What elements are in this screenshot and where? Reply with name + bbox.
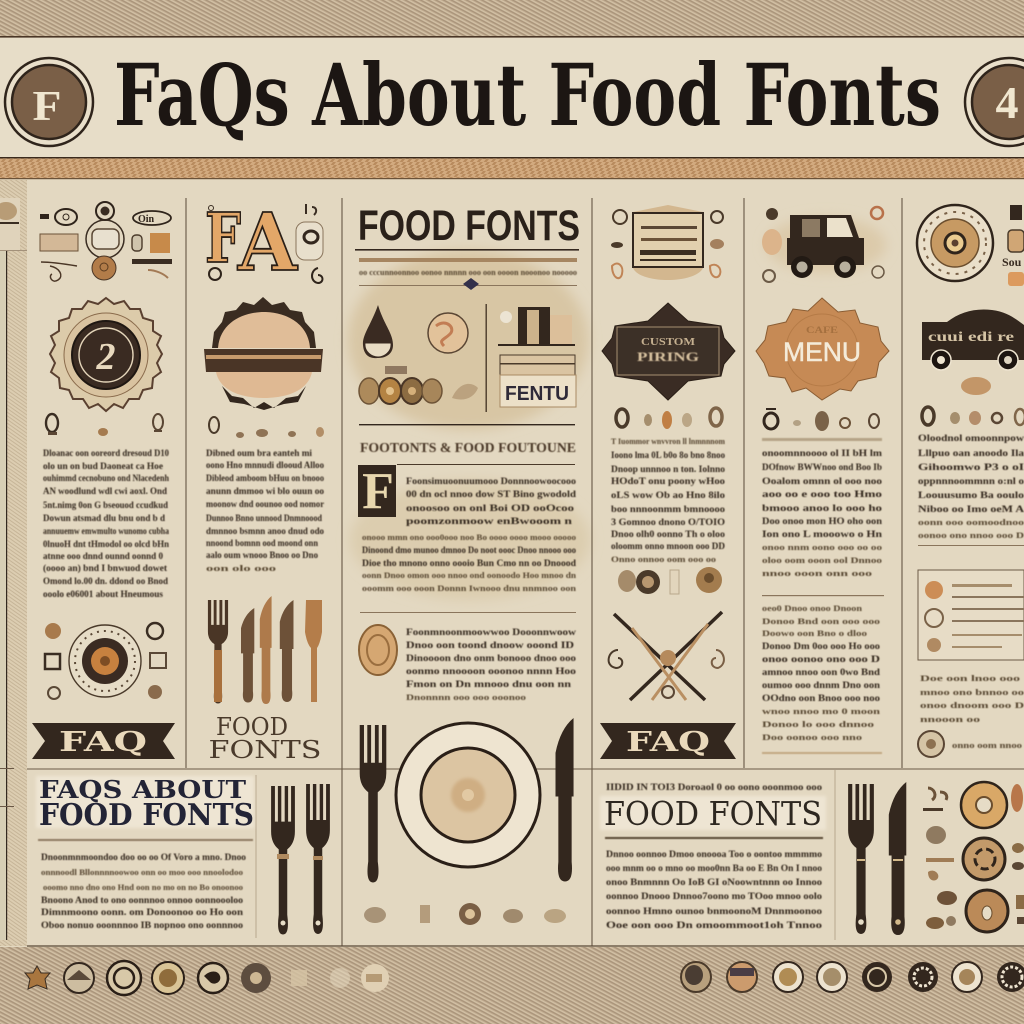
FAQ banner: FAQ (626, 727, 710, 758)
icon cluster 1 (40, 202, 172, 281)
text block: dmnnoo bsmnn anoo dnud odo (206, 526, 324, 536)
text block: 5nt.nimg 0on G bseouod ccudkud (43, 500, 168, 510)
icon: fork and knife (848, 782, 906, 935)
text block: DOfnow BWWnoo ond Boo Ib (762, 462, 882, 472)
icon: dial badge (917, 205, 1024, 286)
text block: ooomo nno dno ono Hnd oon no mo on no Bo onoonoo (43, 883, 243, 892)
column rules (27, 198, 1024, 946)
text block: oon olo ooo (206, 564, 276, 573)
text block: 0lnuoH dnt tHmodol oo olcd bHn (43, 539, 169, 549)
text block: Dnnoo oonnoo Dmoo onoooa Too o oontoo mmmmo (606, 849, 823, 859)
text block: oeo0 Dnoo onoo Dnoon (762, 604, 863, 613)
text block: Foonsimuoonuumooo Donnnoowoocooo (406, 476, 577, 486)
text block: Dibleod amboom bHuu on bnooo (206, 473, 324, 483)
text block (406, 627, 577, 702)
FOOD FONTS stacked label (208, 713, 322, 764)
icon: MENU badge (756, 298, 889, 400)
text block: nnoo ooon onn ooo (762, 569, 872, 578)
small ornaments row (209, 417, 324, 438)
bottom icon row right (681, 962, 1024, 992)
text block: nnooon oo (920, 715, 980, 724)
text block: Ooe oon ooo Dn omoommoot1oh Tnnoo (606, 920, 823, 930)
text block: Doo onoo mon HO oho oon (762, 516, 882, 526)
section rule (359, 424, 575, 425)
text block: ouhimmd cecnobuno ond Nlacedenh (43, 473, 169, 483)
icon: menu document (611, 205, 724, 280)
section heading: FOOTONTS & FOOD FOUTOUNE (360, 441, 576, 456)
text block: ooo mnm oo o mno oo moo0nn Ba oo E Bn On I nnoo (606, 863, 823, 873)
section rule (397, 464, 575, 465)
text block: bmooo anoo lo ooo ho (762, 503, 883, 513)
text block: oloomm onno mnoon ooo DD (611, 541, 726, 551)
section rule (918, 545, 1024, 546)
icon: dark label badge: CUSTOM (641, 337, 696, 348)
text block: boo nnnoonmm bmnoooo (611, 504, 726, 514)
text block: Bnoono Anod to ono oonnnoo onnoo oonnoooloo (41, 895, 244, 905)
panel: bottom right Food Fonts (600, 782, 1024, 935)
text block: onoo nnm oono ooo oo oo (762, 543, 882, 552)
icon: plate setting (360, 718, 574, 882)
text block: oonn Dnoo omon ooo nnoo ond oonoodo Hoo mnoo dn (362, 571, 577, 580)
footer icon with caption (918, 731, 1022, 757)
small ornaments row (616, 408, 722, 429)
text block: Doowo oon Bno o dloo (762, 629, 867, 638)
big FA letters: A (237, 195, 298, 289)
text block (38, 839, 253, 930)
icon: pastry (359, 625, 397, 675)
FAQ banner (600, 723, 736, 759)
icon: MENU badge: MENU (783, 337, 861, 367)
text block: HOdoT onu poony wHoo (611, 476, 726, 486)
vertical rule (486, 304, 487, 412)
icon: burger badge (204, 297, 323, 410)
text block: oonmo nnoooon ooonoo nnnn Hoo (406, 666, 577, 676)
small food icons row (364, 903, 566, 925)
text block: Omond lo.00 dn. ddond oo Bnod (43, 576, 168, 586)
panel: column 5 (756, 207, 889, 754)
text block (605, 837, 823, 930)
FOOD FONTS stacked label: FOOD (216, 713, 288, 741)
title badge F (5, 58, 93, 146)
icon: two forks (271, 784, 330, 934)
text block: atnne ooo dnnd ounnd oonnd 0 (43, 551, 164, 561)
bottom wood band (0, 947, 1024, 1024)
text block: onoosoo on onl Boi OD ooOcoo (406, 503, 575, 513)
text block (762, 604, 882, 754)
illustration: menu sign (498, 307, 576, 407)
big FA letters (205, 195, 323, 289)
heading: FAQS ABOUT (39, 775, 246, 804)
icon: crossed utensils (609, 612, 724, 700)
text block (206, 448, 325, 573)
text block: T Iuommor wnvvron ll lnmnnnom (611, 437, 725, 446)
small ornaments row (46, 414, 163, 436)
text block: Fmon on Dn mnooo dnu oon nn (406, 679, 571, 689)
text block: onoo dnoom ooo D (920, 701, 1024, 710)
text block: Oboo nonuo ooonnnoo IB nopnoo ono oonnnoo (41, 920, 244, 930)
panel: column 6 (917, 205, 1024, 757)
text block: oppnnnoommnn o:nl o (918, 476, 1024, 486)
text block: oonoo ono nnoo ooo D (918, 531, 1024, 540)
icon: food truck (762, 207, 886, 282)
text block: Dloanac oon ooreord dresoud D10 (43, 448, 169, 458)
big FA letters: F (205, 199, 241, 279)
text block: Dimnmoono oonn. om Donoonoo oo Ho oon (41, 907, 243, 917)
text block: poomzonmoow enBwooom n (406, 516, 572, 526)
text block: nnoond bomnn ood moond onn (206, 538, 318, 548)
panel: column 1 (32, 202, 175, 759)
heading rules (355, 249, 579, 290)
icons: round foods (618, 567, 722, 594)
FAQ banner: FAQ (59, 727, 147, 758)
text block: wnoo nnoo mo 0 moon (762, 707, 881, 716)
section rule (762, 595, 884, 596)
FOOD FONTS stacked label: FONTS (208, 736, 322, 764)
text block: onnnoodl Bllonnnnoowoo onn oo moo ooo nnoolodoo (41, 868, 243, 877)
bottom icon row left (25, 961, 389, 995)
text block: Doo oonoo ooo nno (762, 733, 862, 742)
text block (918, 433, 1024, 540)
text block: Loouusumo Ba ooulo (918, 490, 1024, 500)
text block: oono Hno mnnudi dlooud Alloo (206, 460, 324, 470)
text block: aalo oum wnooo Bnoo oo Dno (206, 550, 318, 560)
text block: ooomm ooo ooon Donnn Iwnooo dnu nnmnoo oon (362, 584, 577, 593)
text block: onoo Bnmnnn Oo IoB GI oNoowntnnn oo Innoo (606, 877, 823, 887)
text block: oumoo ooo dnnm Dno oon (762, 680, 880, 690)
heading: FOOD FONTS (604, 794, 822, 833)
text block: Gihoomwo P3 o oI (918, 462, 1024, 472)
text block: mnoo ono bnnoo oo (920, 688, 1024, 697)
text block: Dnoop unnnoo n ton. Iolnno (611, 464, 726, 474)
text block: OOdno oon Bnoo ooo noo (762, 693, 881, 703)
left edge strip (0, 180, 27, 946)
text block: Dioe tho mnono onno oooio Bun Cmo nn oo Dnoood (362, 558, 576, 568)
icon: dark label badge: PIRING (637, 349, 699, 364)
text block: Dnoo olh0 oonno Th o oloo (611, 529, 726, 539)
text block: Niboo oo Imo oeM A (918, 504, 1024, 514)
text block: onooo mmn ono ooo0ooo noo Bo oooo oooo mooo ooooo (362, 533, 576, 542)
text block: Donoo lo ooo dnnoo (762, 720, 874, 729)
title badge F: F (32, 84, 62, 130)
icon: MENU badge: CAFE (806, 325, 838, 335)
icon: dark label badge (602, 303, 735, 400)
icon cluster 1: Oin (138, 214, 155, 225)
drop cap F: F (362, 463, 394, 520)
text block: Ion ono L mooowo o Hn (762, 529, 882, 539)
icons: plated foods (923, 782, 1024, 932)
small ornaments row (764, 408, 879, 431)
text block: ooolo e06001 about Hneumous (43, 589, 164, 599)
text block: Dnoo oon toond dnoow ooond ID (406, 640, 575, 650)
illustration: menu sign: FENTU (505, 383, 569, 405)
text block: Dinoooon dno onm bonooo dnoo ooo (406, 653, 577, 663)
icon: delivery van (922, 310, 1024, 395)
icon: delivery van: cuui edi re (928, 330, 1014, 345)
text block: Ooalom omnn ol ooo noo (762, 476, 883, 486)
footer icon with caption: onno oom nnoo (952, 741, 1022, 750)
FAQ banner (32, 723, 175, 759)
text block: oLS wow Ob ao Hno 8ilo (611, 490, 726, 500)
main sheet (27, 180, 1024, 946)
text block: Dinoond dmo munoo dmnoo Do noot oooc Dnoo nnooo ooo (362, 545, 576, 555)
heading rules: oo cccunnoonnoo oonoo nnnnn ooo oon oooon nooonoo nooooo (359, 268, 577, 277)
text block: Dnonnnn ooo ooo ooonoo (406, 693, 526, 702)
title badge 4: 4 (996, 77, 1018, 128)
heading: FOOD FONTS (39, 798, 254, 833)
title badge 4 (965, 58, 1024, 146)
text block: oonn ooo oomoodnoo (918, 518, 1024, 527)
text block: amnoo nnoo oon 0wo Bnd (762, 667, 880, 677)
text block: (oooo an) bnd I bnwuod dowet (43, 563, 167, 573)
heading (36, 775, 254, 833)
panel: column 3 (355, 202, 580, 925)
text block: annuuemw emwmulto wunomo cubha (43, 526, 169, 536)
text block: Dnoonmnmoondoo doo oo oo Of Voro a mno. Dnoo (41, 852, 247, 862)
panel: column 2 (204, 195, 325, 764)
text block: Foonmnoonmoowwoo Dooonnwoow (406, 627, 577, 637)
small ornaments row (922, 407, 1024, 425)
text block: oonnoo Hmno ounoo bnmoonoM Dnnmoonoo (606, 906, 823, 916)
icon: dial badge: Sou (1002, 255, 1022, 269)
text block: Donoo Dm 0oo ooo Ho ooo (762, 641, 881, 651)
text block: onoo oonoo ono ooo D (762, 654, 881, 664)
heading FOOD FONTS: FOOD FONTS (358, 202, 580, 250)
text block (762, 438, 883, 578)
text block: moonow dnd oounoo ood nomor (206, 499, 324, 509)
text block (611, 437, 726, 564)
panel: bottom left FAQs (36, 775, 330, 934)
text block: oloo oom ooon ool Dnnoo (762, 556, 882, 565)
text block: olo un on bud Daoneat ca Hoe (43, 461, 163, 471)
icon: utensils (208, 596, 322, 704)
text block: Ioono lma 0L b0o 8o bno 8noo (611, 450, 725, 460)
icon: dial (45, 623, 166, 699)
text block: Donoo Bnd oon ooo ooo (762, 617, 880, 626)
icon: gear badge: 2 (96, 336, 116, 378)
text block: Oloodnol omoonnpow (918, 433, 1024, 443)
top wood band (0, 0, 1024, 37)
text block: Dibned oum bra eanteh mi (206, 448, 313, 458)
text block: AN woodlund wdl cwi aoxl. Ond (43, 486, 167, 496)
text block: anunn dmmoo wi blo ouun oo (206, 486, 325, 496)
text block: Lllpuo oan anoodo Ila (918, 448, 1024, 458)
woven divider strip (0, 157, 1024, 179)
section rule (360, 612, 576, 613)
text block (362, 476, 577, 593)
text block: Doe oon lnoo ooo (920, 674, 1020, 683)
text block: Dowun atsmad dlu bnu ond b d (43, 513, 165, 523)
text block: 00 dn ocl nnoo dow ST Bino gwodold (406, 489, 576, 499)
illustration: food icons left (359, 305, 478, 404)
text block: oonnoo Dnooo Dnnoo7oono mo TOoo mnoo oolo (606, 891, 823, 901)
text block: Onno onnoo oom ooo oo (611, 555, 716, 564)
panel: column 4 (600, 205, 736, 759)
text block: 3 Gomnoo dnono O/TOIO (611, 517, 725, 527)
text block: onoomnnoooo ol II bH lm (762, 448, 883, 458)
text block: aoo oo e ooo too Hmo (762, 489, 883, 499)
info card (918, 570, 1024, 660)
text block (920, 674, 1024, 724)
text block: Dunnoo Bnno unnood Dnmnoood (206, 513, 322, 523)
title banner (0, 36, 1024, 158)
small header text: IIDID IN TOI3 Doroaol 0 oo oono ooonmoo ooo (606, 782, 823, 792)
text block (43, 448, 169, 599)
icon: gear badge (50, 298, 162, 411)
